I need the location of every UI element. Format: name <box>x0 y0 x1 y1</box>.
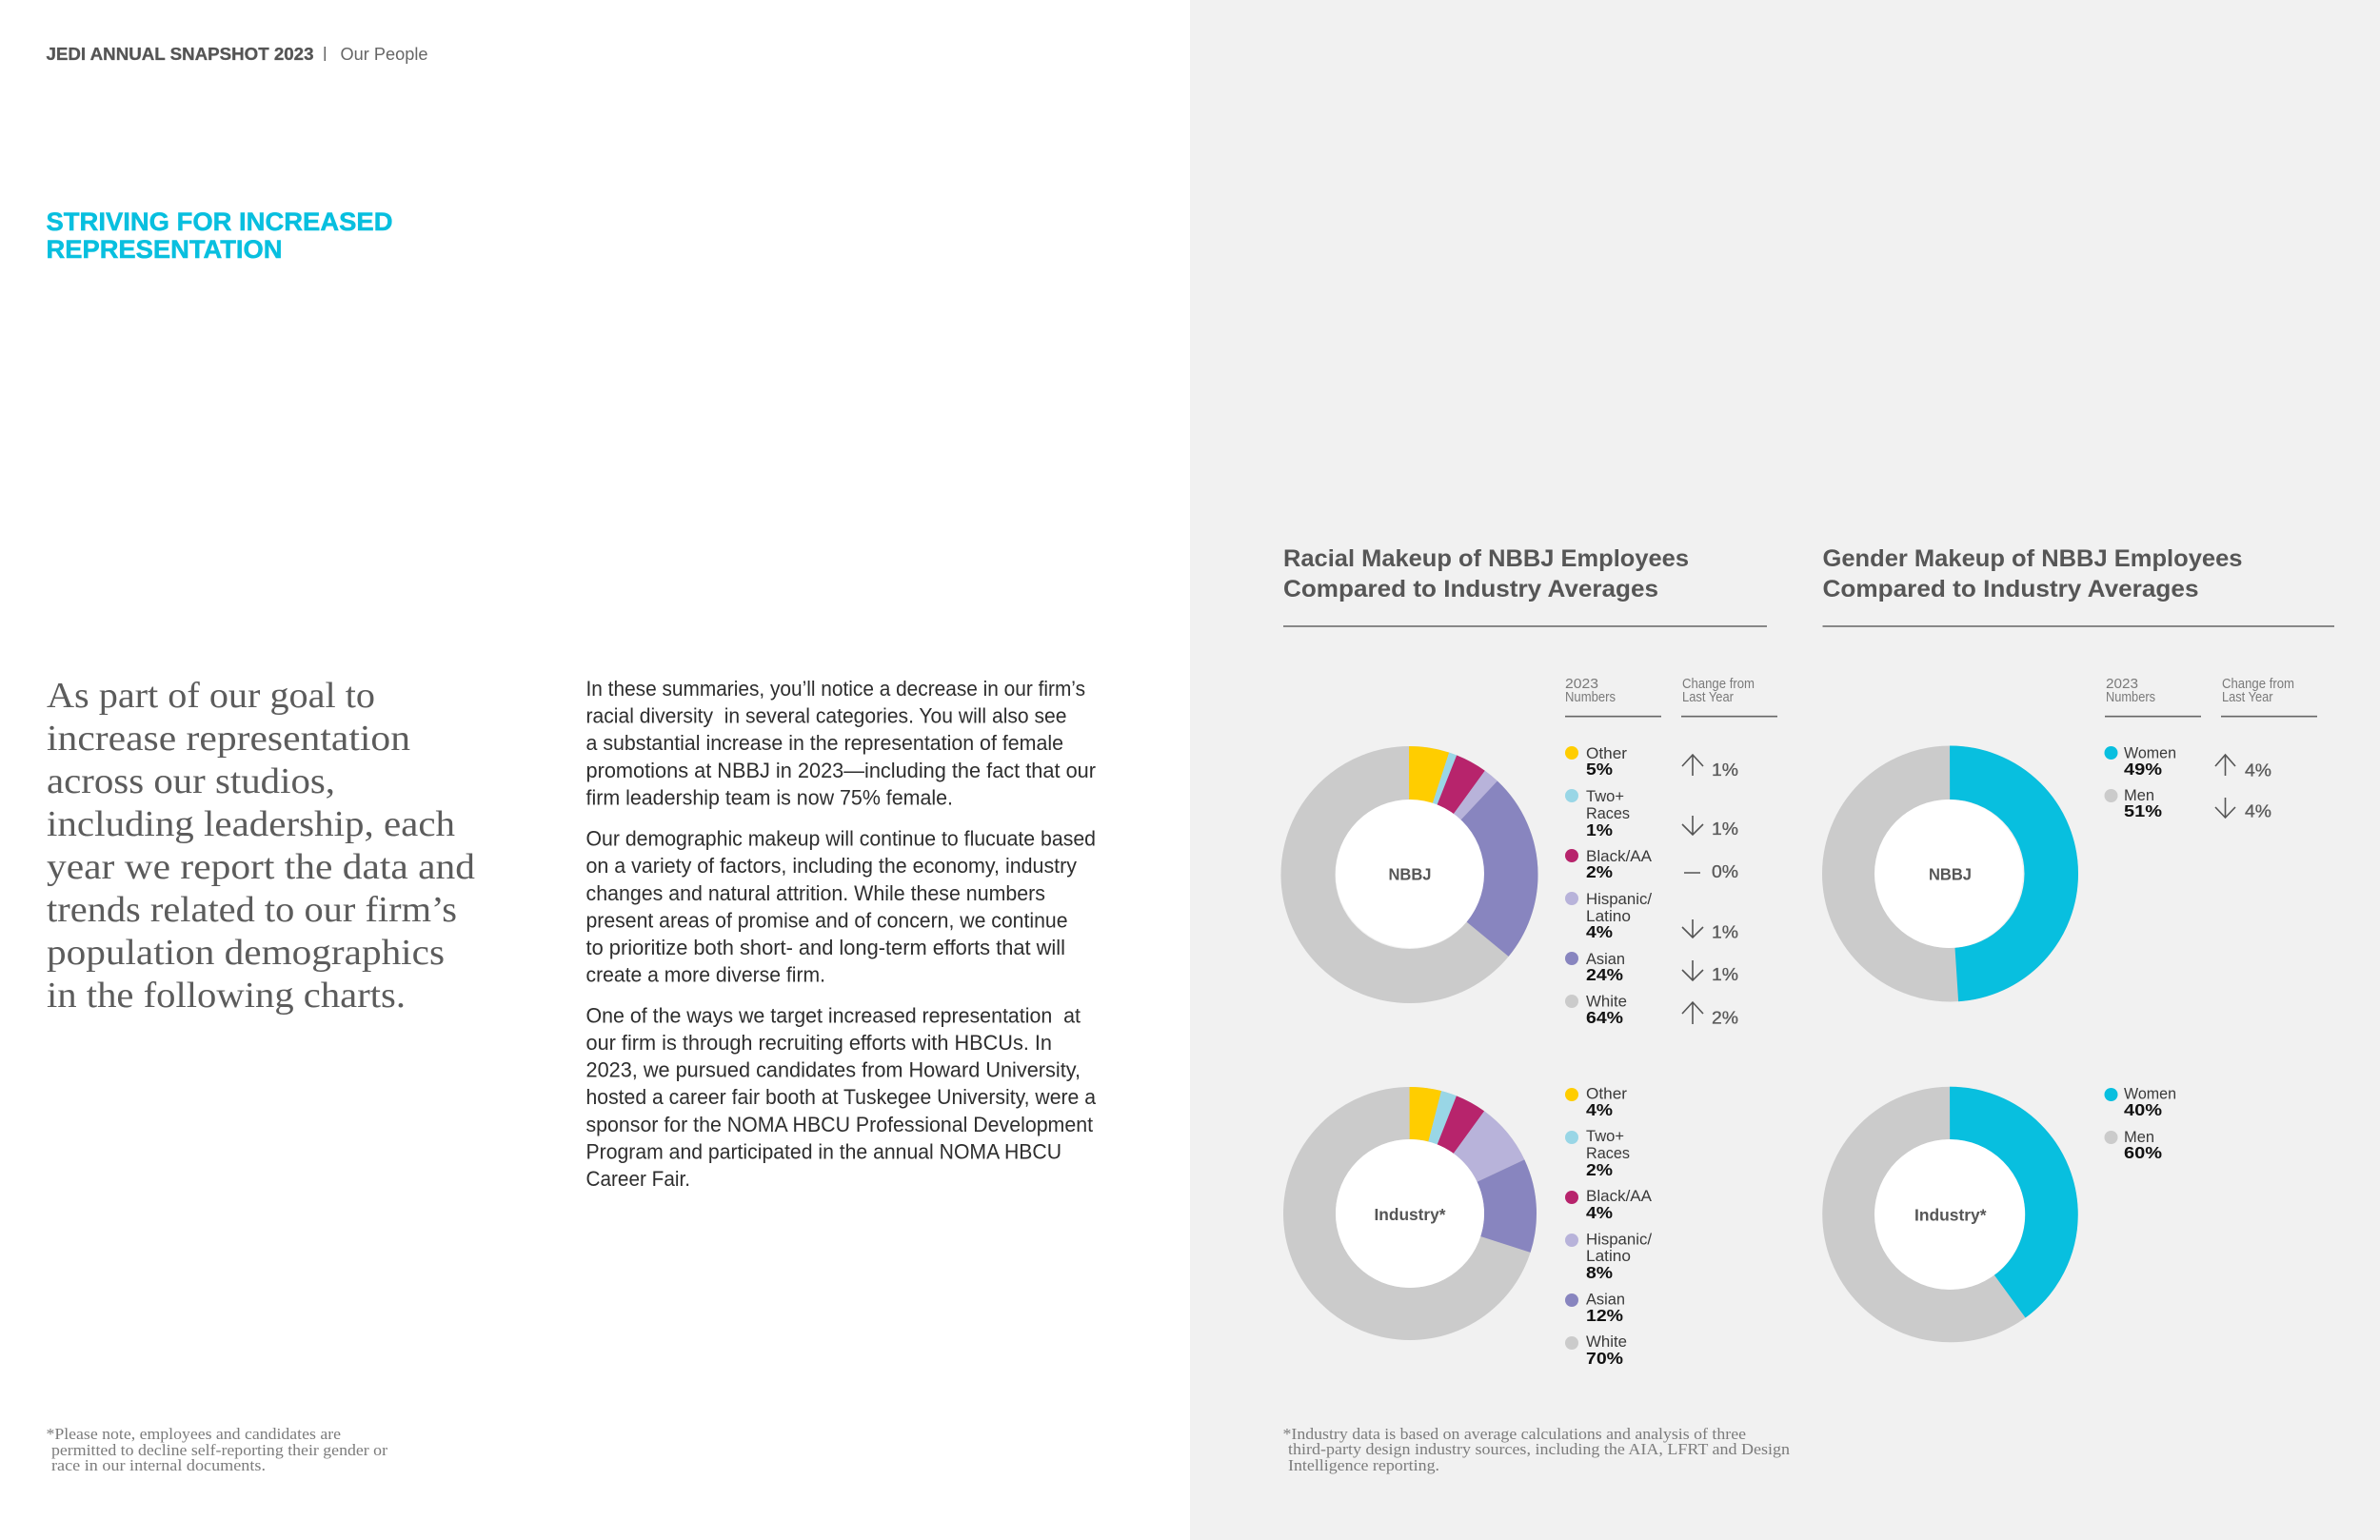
row: Black/AA: Black/AA <box>1586 847 1653 865</box>
row: Other: 4% <box>1586 1100 1613 1119</box>
intro statement: increase representation <box>47 719 410 759</box>
body copy <box>586 677 1097 1191</box>
row: Hispanic/Latino <box>1565 890 1738 942</box>
intro statement: population demographics <box>47 933 445 973</box>
footnote: industry data sources: *Industry data is based on average calculations and analysis of three <box>1283 1425 1746 1443</box>
heading: racial makeup <box>1283 545 1767 626</box>
row: Two+ Races: Two+ <box>1586 1127 1624 1145</box>
donut chart: industry race: Industry* <box>1375 1205 1446 1224</box>
row: Black/AA <box>1565 1187 1653 1222</box>
donut chart: industry race <box>1310 1114 1510 1313</box>
heading: gender makeup: Compared to Industry Averages <box>1822 576 2199 602</box>
row: Hispanic/Latino: 8% <box>1586 1263 1613 1282</box>
row: Black/AA <box>1565 847 1738 881</box>
row: Men: 60% <box>2124 1143 2162 1162</box>
row: Men: Men <box>2124 1128 2154 1146</box>
row: Men <box>2104 786 2271 820</box>
table header: gender columns: 2023 <box>2106 677 2138 692</box>
row: Two+ Races: 2% <box>1586 1160 1613 1179</box>
row: Two+ Races <box>1565 787 1738 839</box>
donut chart: industry gender: Industry* <box>1914 1206 1987 1225</box>
row: Two+ Races <box>1565 1127 1630 1179</box>
header: report name and section: JEDI ANNUAL SNAPSHOT 2023 <box>46 44 313 64</box>
paragraph 2: create a more diverse firm. <box>586 963 825 986</box>
row: Asian <box>1565 950 1738 984</box>
heading: gender makeup <box>1822 545 2334 626</box>
row: Black/AA: 4% <box>1586 1203 1613 1222</box>
row: Men <box>2104 1128 2162 1162</box>
legend: NBBJ gender with year-over-year change <box>2104 744 2271 820</box>
row: Asian: Asian <box>1586 1291 1625 1308</box>
donut chart: NBBJ gender: NBBJ <box>1929 864 1972 883</box>
row: White: White <box>1586 992 1627 1011</box>
row: Asian: 24% <box>1586 965 1623 984</box>
intro statement: including leadership, each <box>47 804 455 844</box>
heading: gender makeup: Gender Makeup of NBBJ Employees <box>1822 545 2243 572</box>
footnote: industry data sources: Intelligence reporting. <box>1288 1456 1439 1474</box>
paragraph 1: a substantial increase in the representation of female <box>586 731 1063 755</box>
panel: grey chart background <box>1190 0 2380 1540</box>
paragraph 1 <box>586 677 1096 809</box>
paragraph 1: promotions at NBBJ in 2023—including the fact that our <box>586 759 1096 782</box>
donut chart: industry gender <box>1849 1114 2052 1315</box>
intro statement: in the following charts. <box>47 976 406 1016</box>
header: report name and section: Our People <box>341 44 428 64</box>
paragraph 3 <box>586 1003 1097 1191</box>
row: Hispanic/Latino: Hispanic/ <box>1586 1230 1652 1249</box>
row: Women <box>2104 744 2271 780</box>
table header: gender columns <box>2105 677 2317 717</box>
legend: industry race <box>1565 1085 1653 1368</box>
row: Other: 5% <box>1586 760 1613 779</box>
row: Asian: 12% <box>1586 1306 1623 1325</box>
row: White: 64% <box>1586 1008 1623 1027</box>
intro statement <box>47 676 475 1016</box>
paragraph 2: changes and natural attrition. While these numbers <box>586 881 1045 905</box>
row: Other <box>1565 744 1738 780</box>
paragraph 2: Our demographic makeup will continue to flucuate based <box>586 826 1096 851</box>
table header: gender columns: Change from <box>2222 677 2294 692</box>
row: Black/AA: Black/AA <box>1586 1187 1653 1205</box>
title: STRIVING FOR INCREASED <box>46 207 393 236</box>
footnote: industry data sources: third-party design industry sources, including the AIA, LFRT and Design <box>1288 1440 1790 1458</box>
table header: racial columns: Change from <box>1682 677 1755 692</box>
paragraph 2: to prioritize both short- and long-term efforts that will <box>586 936 1065 959</box>
paragraph 3: hosted a career fair booth at Tuskegee University, were a <box>586 1085 1097 1109</box>
table header: racial columns: Numbers <box>1565 690 1616 705</box>
donut chart: NBBJ gender <box>1849 773 2052 975</box>
intro statement: year we report the data and <box>47 847 475 887</box>
heading: racial makeup: Racial Makeup of NBBJ Employees <box>1283 545 1689 572</box>
row: White <box>1565 1333 1627 1368</box>
row: Asian: Asian <box>1586 950 1625 968</box>
row: Other: Other <box>1586 1085 1627 1102</box>
row: Women: 4% <box>2245 761 2271 780</box>
paragraph 2: present areas of promise and of concern, we continue <box>586 908 1068 933</box>
footnote: industry data sources <box>1283 1425 1790 1474</box>
paragraph 3: Career Fair. <box>586 1167 690 1191</box>
row: Hispanic/Latino: Hispanic/ <box>1586 890 1652 908</box>
row: Hispanic/Latino: Latino <box>1586 907 1631 925</box>
row: Men: 4% <box>2245 801 2271 820</box>
intro statement: As part of our goal to <box>47 676 375 716</box>
table header: gender columns: Numbers <box>2106 690 2155 705</box>
paragraph 1: firm leadership team is now 75% female. <box>586 786 953 809</box>
paragraph 1: In these summaries, you’ll notice a decrease in our firm’s <box>586 677 1085 701</box>
row: Two+ Races: Races <box>1586 804 1630 822</box>
row: White <box>1565 992 1738 1028</box>
row: Women: Women <box>2124 1085 2176 1102</box>
paragraph 3: One of the ways we target increased representation at <box>586 1003 1081 1028</box>
footnote: self-reporting note: permitted to decline self-reporting their gender or <box>51 1441 388 1459</box>
donut chart: NBBJ race: NBBJ <box>1388 864 1432 883</box>
paragraph 2 <box>586 826 1096 986</box>
table header: gender columns: Last Year <box>2222 690 2273 705</box>
legend: NBBJ race with year-over-year change <box>1565 744 1738 1028</box>
title: REPRESENTATION <box>46 235 282 264</box>
header: report name and section <box>46 44 428 64</box>
table header: racial columns <box>1565 677 1777 717</box>
footnote: self-reporting note <box>46 1425 388 1474</box>
row: Men: 51% <box>2124 801 2162 820</box>
row: Women: 49% <box>2124 760 2162 779</box>
legend: industry gender <box>2104 1085 2176 1162</box>
row: Hispanic/Latino: 1% <box>1712 923 1738 942</box>
row: Women: 40% <box>2124 1100 2162 1119</box>
paragraph 3: 2023, we pursued candidates from Howard University, <box>586 1058 1081 1081</box>
paragraph 3: our firm is through recruiting efforts with HBCUs. In <box>586 1031 1052 1055</box>
row: Men: Men <box>2124 786 2154 804</box>
row: Other: 1% <box>1712 760 1738 780</box>
intro statement: trends related to our firm’s <box>47 890 457 930</box>
intro statement: across our studios, <box>47 761 335 801</box>
row: White: 70% <box>1586 1349 1623 1368</box>
row: White: 2% <box>1712 1009 1738 1028</box>
row: Women <box>2104 1085 2176 1119</box>
paragraph 2: on a variety of factors, including the economy, industry <box>586 854 1077 878</box>
title <box>46 207 393 264</box>
table header: racial columns: Last Year <box>1682 690 1734 705</box>
row: Black/AA: 2% <box>1586 862 1613 881</box>
paragraph 1: racial diversity in several categories. You will also see <box>586 704 1066 727</box>
row: Asian <box>1565 1291 1625 1325</box>
row: Other <box>1565 1085 1627 1119</box>
paragraph 3: sponsor for the NOMA HBCU Professional Development <box>586 1113 1093 1136</box>
row: Hispanic/Latino: Latino <box>1586 1247 1631 1265</box>
row: Two+ Races: 1% <box>1712 819 1738 839</box>
row: Other: Other <box>1586 744 1627 762</box>
row: Two+ Races: Races <box>1586 1144 1630 1162</box>
footnote: self-reporting note: race in our internal documents. <box>51 1456 266 1474</box>
row: Women: Women <box>2124 744 2176 761</box>
footnote: self-reporting note: *Please note, employees and candidates are <box>46 1425 341 1443</box>
paragraph 3: Program and participated in the annual NOMA HBCU <box>586 1140 1061 1163</box>
row: Hispanic/Latino <box>1565 1230 1652 1282</box>
row: Two+ Races: 1% <box>1586 820 1613 839</box>
row: Black/AA: 0% <box>1712 862 1738 881</box>
donut chart: NBBJ race <box>1308 773 1511 977</box>
heading: racial makeup: Compared to Industry Averages <box>1283 576 1658 602</box>
row: Two+ Races: Two+ <box>1586 787 1624 805</box>
row: Asian: 1% <box>1712 965 1738 984</box>
row: White: White <box>1586 1333 1627 1351</box>
row: Hispanic/Latino: 4% <box>1586 922 1613 941</box>
table header: racial columns: 2023 <box>1565 677 1598 692</box>
